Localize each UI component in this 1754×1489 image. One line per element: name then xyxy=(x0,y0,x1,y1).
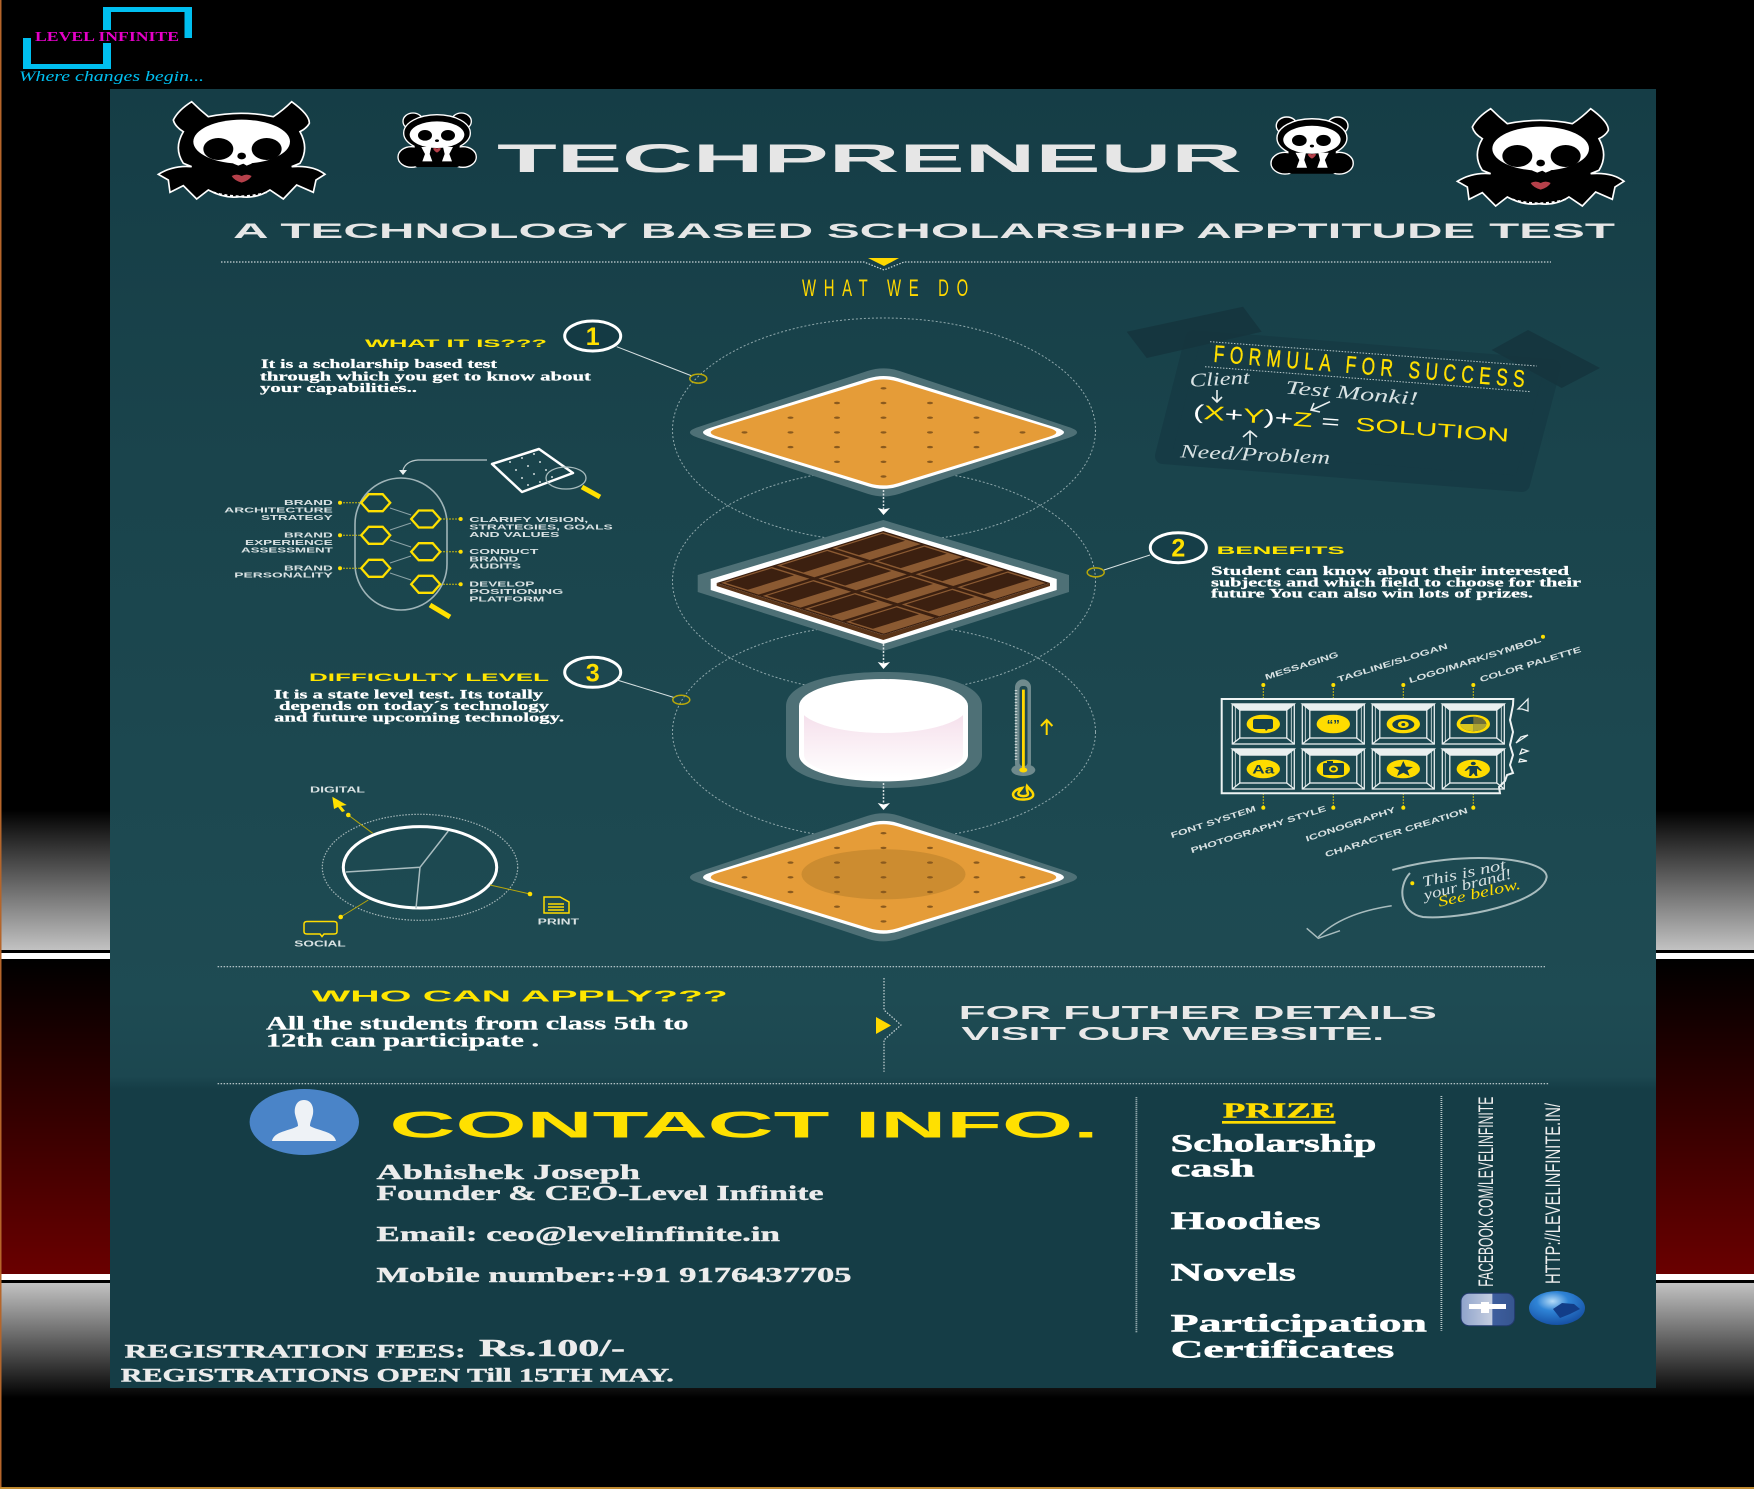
step number 2: 2 xyxy=(1171,535,1185,563)
label: digital: DIGITAL xyxy=(310,786,365,795)
right labels: CLARIFY VISION, xyxy=(469,517,588,524)
step number 1 xyxy=(565,321,621,351)
icon: camera xyxy=(1323,761,1344,775)
text: what it is body: through which you get to know about xyxy=(260,368,592,384)
further details: FOR FUTHER DETAILS xyxy=(959,1003,1437,1023)
heading: difficulty level: DIFFICULTY LEVEL xyxy=(309,672,550,684)
icon: left bear xyxy=(398,113,476,167)
top cracker xyxy=(690,368,1077,496)
text: who can apply body: All the students from class 5th to xyxy=(266,1013,688,1034)
leader line 1 xyxy=(617,347,707,383)
thermometer xyxy=(1011,679,1035,776)
heading: what it is: WHAT IT IS??? xyxy=(365,338,548,350)
stem dots xyxy=(1261,635,1545,810)
bottom cracker xyxy=(690,813,1077,941)
icon: cursor xyxy=(332,797,347,812)
bottom labels: ICONOGRAPHY xyxy=(1304,805,1397,844)
icon: document xyxy=(544,897,569,913)
icon: left bat skull xyxy=(158,102,325,199)
leaders xyxy=(338,813,532,919)
text: difficulty body xyxy=(274,686,564,725)
logo: Level Infinite: Where changes begin... xyxy=(19,69,204,85)
right labels: POSITIONING xyxy=(469,589,564,596)
heading: prize: PRIZE xyxy=(1223,1099,1335,1123)
facebook url: FACEBOOK.COM/LEVELINFINITE xyxy=(1475,1097,1498,1287)
right labels: PLATFORM xyxy=(469,596,545,603)
icon: messaging xyxy=(1253,719,1273,731)
text: difficulty body: depends on today´s technology xyxy=(279,698,550,713)
pie outline xyxy=(343,827,497,908)
text: benefits body xyxy=(1211,563,1581,601)
marshmallow xyxy=(786,672,982,788)
heading: prize xyxy=(1222,1099,1336,1124)
contact details: Founder & CEO-Level Infinite xyxy=(376,1181,824,1205)
text: what it is body: It is a scholarship based test xyxy=(261,356,498,371)
capsule xyxy=(355,478,447,610)
right labels: CONDUCT xyxy=(469,549,540,556)
heading: what we do: WHAT WE DO xyxy=(802,276,968,302)
icon: speech bubble xyxy=(304,922,337,936)
connectors xyxy=(338,501,463,586)
arrow: chocolate to marshmallow xyxy=(878,644,890,669)
left labels: PERSONALITY xyxy=(234,573,333,580)
bottom labels: CHARACTER CREATION xyxy=(1324,806,1469,859)
arrow: marshmallow to cracker xyxy=(878,783,890,810)
icon: font Aa: Aa xyxy=(1252,762,1275,776)
card rules xyxy=(1205,342,1537,392)
icon: globe xyxy=(1529,1291,1585,1325)
text: benefits body: Student can know about their interested xyxy=(1211,563,1570,578)
right labels: AUDITS xyxy=(469,564,522,571)
what we do divider xyxy=(221,258,1551,270)
leader line 2 xyxy=(1087,555,1150,577)
text: what it is body: your capabilities.. xyxy=(260,380,417,395)
handwritten: client: Client xyxy=(1189,368,1251,392)
icon: tagline quotes: “” xyxy=(1327,717,1340,732)
hexagons xyxy=(361,494,440,593)
note text: This is not xyxy=(1421,857,1508,891)
main teal panel xyxy=(110,89,1656,1388)
contact details xyxy=(376,1160,852,1287)
outer ring xyxy=(322,814,518,920)
heading: benefits: BENEFITS xyxy=(1217,545,1345,557)
right labels xyxy=(469,517,613,603)
step number 1: 1 xyxy=(586,323,600,351)
bottom labels: FONT SYSTEM xyxy=(1170,804,1257,840)
text: who can apply body xyxy=(266,1013,688,1052)
brand strategy diagram xyxy=(224,449,613,617)
stems xyxy=(1263,685,1473,807)
logo: Level Infinite xyxy=(19,7,204,85)
contact details: Abhishek Joseph xyxy=(376,1160,640,1184)
icon: small cracker with magnifier xyxy=(399,449,600,497)
icon: color palette xyxy=(1460,717,1486,731)
icon: contact avatar xyxy=(250,1089,359,1155)
title: TECHPRENEUR xyxy=(497,137,1242,181)
text: benefits body: subjects and which field to choose for their xyxy=(1211,575,1581,590)
heading: contact info: CONTACT INFO. xyxy=(390,1103,1098,1145)
further details xyxy=(959,1003,1437,1044)
website url: HTTP://LEVELINFINITE.IN/ xyxy=(1542,1103,1565,1284)
left labels: BRAND xyxy=(284,533,333,540)
hand-drawn arrows xyxy=(1212,390,1330,445)
subtitle: A TECHNOLOGY BASED SCHOLARSHIP APPTITUDE TEST xyxy=(233,220,1615,243)
handwritten: need/problem: Need/Problem xyxy=(1178,441,1331,469)
who can apply xyxy=(266,989,728,1052)
prize list: Scholarship xyxy=(1171,1131,1376,1158)
note text: your brand! xyxy=(1420,867,1513,904)
logo: Level Infinite: LEVEL INFINITE xyxy=(35,30,179,45)
pie chart xyxy=(294,786,579,949)
heading: who can apply: WHO CAN APPLY??? xyxy=(312,989,728,1006)
contact details: Mobile number:+91 9176437705 xyxy=(376,1263,852,1287)
left labels: BRAND xyxy=(284,565,333,572)
pie spokes xyxy=(346,831,448,908)
right labels: DEVELOP xyxy=(469,582,535,589)
label: print: PRINT xyxy=(538,917,579,926)
divider lines xyxy=(218,967,1549,1084)
tape left xyxy=(1127,307,1262,358)
left labels: ASSESSMENT xyxy=(241,548,334,555)
text: what it is body xyxy=(260,356,592,395)
icon: logo eye xyxy=(1392,719,1414,730)
prize list: cash xyxy=(1171,1156,1255,1183)
right labels: BRAND xyxy=(469,556,518,563)
brand chocolate grid xyxy=(1170,635,1583,859)
icon: character xyxy=(1464,762,1482,776)
contact details: Email: ceo@levelinfinite.in xyxy=(376,1222,780,1246)
equation left: (X + Y )+ Z = xyxy=(1192,401,1341,434)
icon discs xyxy=(1247,715,1490,778)
top labels: MESSAGING xyxy=(1264,650,1340,682)
prize list: Novels xyxy=(1171,1259,1296,1286)
registration info xyxy=(121,1336,674,1387)
heading: formula for success: FORMULA FOR SUCCESS xyxy=(1213,341,1526,393)
left labels: BRAND xyxy=(284,500,333,507)
left labels: STRATEGY xyxy=(261,515,333,522)
step number 2 xyxy=(1150,533,1206,563)
handle xyxy=(430,605,450,617)
section 2: benefits xyxy=(1087,533,1581,601)
note text xyxy=(1420,857,1522,911)
note: this is not your brand xyxy=(1307,857,1547,938)
text: who can apply body: 12th can participate . xyxy=(266,1031,539,1052)
prize list: Hoodies xyxy=(1171,1208,1321,1235)
step number 3 xyxy=(565,657,621,687)
text: difficulty body: It is a state level test. Its totally xyxy=(274,686,544,701)
tape right xyxy=(1492,330,1600,388)
chocolate bar xyxy=(698,520,1069,651)
bottom labels: PHOTOGRAPHY STYLE xyxy=(1190,804,1328,855)
social links xyxy=(1461,1097,1585,1326)
step number 3: 3 xyxy=(586,659,600,687)
note outline xyxy=(1392,858,1547,917)
right labels: STRATEGIES, GOALS xyxy=(469,524,613,531)
note dot xyxy=(1410,881,1414,885)
leader line 3 xyxy=(617,680,690,704)
prize list: Certificates xyxy=(1171,1336,1395,1363)
top labels xyxy=(1264,635,1583,685)
equation right: solution: SOLUTION xyxy=(1355,415,1510,447)
formula for success card xyxy=(1127,307,1600,484)
handwritten: test monki: Test Monki! xyxy=(1285,377,1419,410)
note arrow xyxy=(1307,906,1392,938)
top labels: TAGLINE/SLOGAN xyxy=(1336,642,1449,684)
center chevron divider xyxy=(876,978,901,1072)
left labels: EXPERIENCE xyxy=(245,540,333,547)
bottom labels xyxy=(1170,804,1469,859)
icon: right bat skull xyxy=(1457,109,1624,206)
section 1: what it is xyxy=(260,321,707,395)
icon: star xyxy=(1394,761,1413,776)
prize list: Participation xyxy=(1171,1311,1427,1338)
vertical dividers xyxy=(1136,1096,1441,1333)
prizes panel xyxy=(1171,1099,1427,1363)
card xyxy=(1163,338,1553,484)
text: difficulty body: and future upcoming technology. xyxy=(274,710,564,725)
registration info: REGISTRATIONS OPEN Till 15TH MAY. xyxy=(121,1366,674,1387)
icon: flame xyxy=(1013,786,1033,800)
registration info: REGISTRATION FEES: xyxy=(125,1341,466,1362)
left labels xyxy=(224,500,334,580)
note text: See below. xyxy=(1437,877,1522,911)
top labels: LOGO/MARK/SYMBOL xyxy=(1408,635,1542,685)
icon: up arrow xyxy=(1041,720,1052,735)
torn outline xyxy=(1222,699,1513,793)
registration info: Rs.100/- xyxy=(479,1336,625,1362)
shards xyxy=(1516,699,1528,762)
icon: facebook xyxy=(1461,1293,1515,1326)
label: social: SOCIAL xyxy=(294,940,346,949)
arrow: cracker to chocolate xyxy=(878,490,890,515)
further details: VISIT OUR WEBSITE. xyxy=(961,1024,1384,1044)
orbit circles xyxy=(672,318,1096,840)
prize list xyxy=(1171,1131,1427,1363)
text: benefits body: future You can also win lots of prizes. xyxy=(1211,586,1533,601)
icon: right bear xyxy=(1271,117,1353,174)
left labels: ARCHITECTURE xyxy=(224,508,333,514)
right labels: AND VALUES xyxy=(469,532,560,539)
cells xyxy=(1232,704,1504,789)
top labels: COLOR PALETTE xyxy=(1479,645,1583,684)
section 3: difficulty level xyxy=(274,657,690,725)
